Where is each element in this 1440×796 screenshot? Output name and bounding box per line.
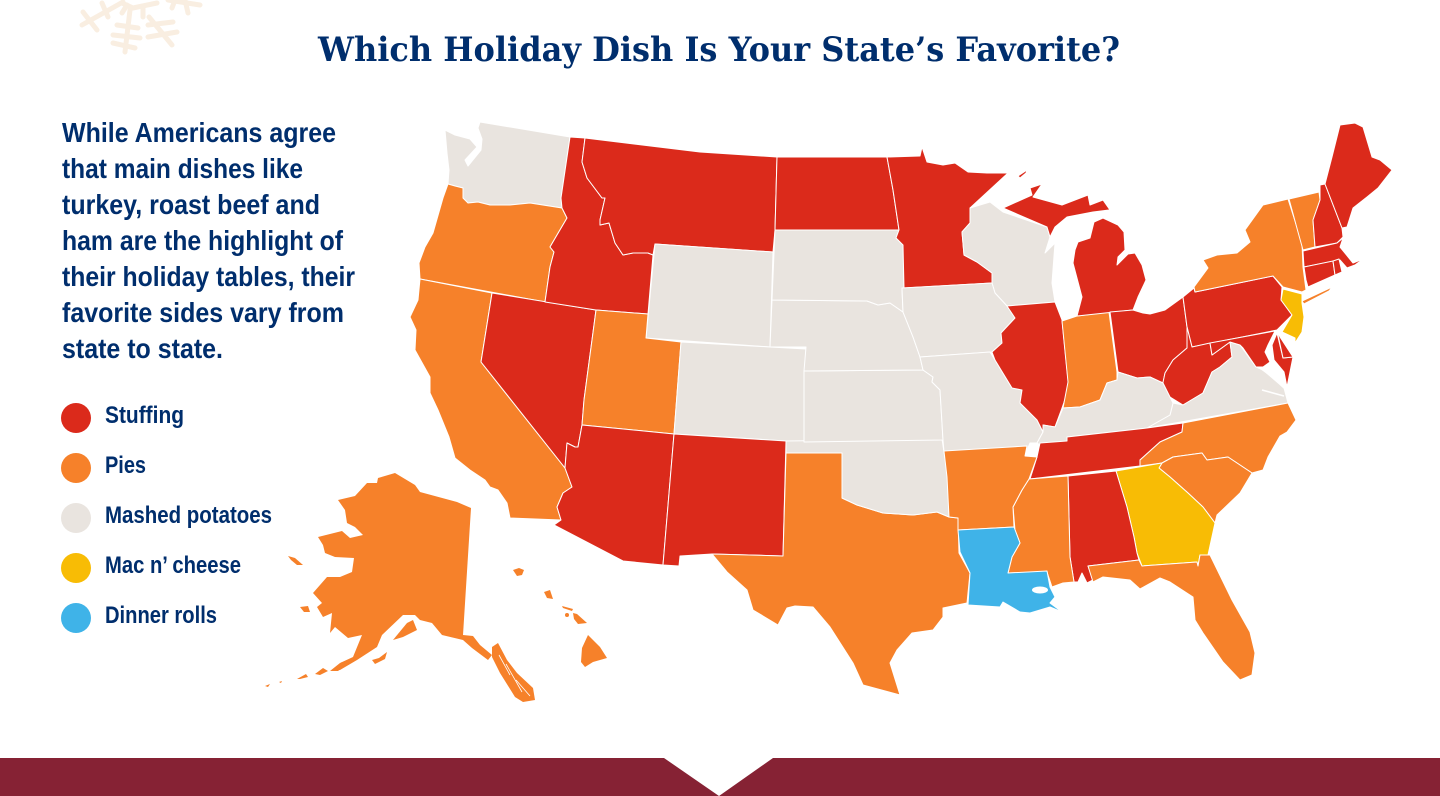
Maryland eastern shore — [1272, 333, 1293, 387]
Michigan lower peninsula — [1073, 218, 1146, 316]
legend: stuffing: Stuffing — [105, 402, 184, 429]
intro text: turkey, roast beef and — [62, 189, 320, 220]
Nunivak island — [300, 606, 310, 612]
Connecticut — [1304, 261, 1335, 287]
Wisconsin — [962, 202, 1055, 306]
legend: dinner rolls — [61, 602, 217, 633]
Vermont — [1289, 192, 1320, 250]
Big Island — [581, 635, 607, 667]
Rhode Island — [1333, 259, 1342, 275]
footer band — [0, 758, 1440, 796]
Southeast Alaska panhandle — [492, 643, 535, 702]
intro text: While Americans agree — [62, 117, 336, 148]
Long Island — [1302, 287, 1332, 304]
decorative snowflake — [82, 0, 200, 52]
Ohio — [1110, 297, 1187, 383]
Minnesota — [887, 147, 1008, 288]
Michigan upper peninsula — [1003, 184, 1117, 237]
Maryland western — [1210, 331, 1275, 367]
intro text: state to state. — [62, 333, 223, 364]
legend: mashed potatoes: Mashed potatoes — [105, 502, 272, 529]
legend: mashed potatoes — [61, 502, 272, 533]
US map — [265, 122, 1392, 702]
Lake Pontchartrain — [1032, 586, 1048, 594]
legend: stuffing — [61, 402, 184, 433]
title: Which Holiday Dish Is Your State’s Favorite? — [317, 30, 1120, 70]
Tennessee — [1030, 423, 1183, 479]
North Dakota — [775, 157, 899, 230]
New Jersey — [1281, 289, 1304, 343]
Kodiak island — [372, 652, 387, 664]
Molokai — [562, 606, 573, 611]
Delaware — [1277, 330, 1293, 358]
Georgia — [1116, 463, 1215, 566]
South Carolina — [1159, 453, 1252, 523]
Idaho — [545, 137, 653, 314]
intro text: their holiday tables, their — [62, 261, 355, 292]
Virginia — [1147, 342, 1288, 428]
Massachusetts — [1303, 238, 1363, 268]
St Lawrence island — [288, 556, 303, 565]
Oklahoma — [786, 439, 949, 517]
New York — [1194, 199, 1306, 292]
Oahu — [544, 590, 553, 599]
Lanai — [565, 613, 569, 617]
Alabama — [1068, 471, 1139, 583]
Arizona — [554, 425, 674, 565]
Kauai — [513, 568, 524, 576]
Alaska mainland — [313, 473, 492, 671]
Missouri — [920, 352, 1043, 455]
intro text — [62, 117, 355, 364]
intro text: ham are the highlight of — [62, 225, 344, 256]
Arkansas — [944, 446, 1037, 530]
legend: pies: Pies — [105, 452, 146, 479]
South Dakota — [772, 230, 904, 312]
Kenai peninsula — [393, 620, 417, 640]
West Virginia — [1162, 327, 1232, 405]
Wyoming — [646, 244, 773, 347]
Texas — [712, 453, 970, 695]
Hawaii — [513, 568, 607, 667]
Washington — [445, 122, 570, 208]
Alaska — [265, 473, 535, 702]
Isle Royale — [1018, 170, 1027, 178]
California — [410, 279, 572, 520]
North Carolina — [1140, 403, 1296, 473]
Kentucky — [1037, 372, 1173, 445]
New Hampshire — [1313, 184, 1343, 247]
Maine — [1325, 123, 1392, 228]
legend: pies — [61, 452, 146, 483]
Colorado — [674, 342, 806, 441]
Iowa — [902, 283, 1015, 357]
Nebraska — [770, 300, 923, 371]
legend: dinner rolls: Dinner rolls — [105, 602, 217, 629]
intro text: favorite sides vary from — [62, 297, 344, 328]
Kansas — [804, 370, 943, 442]
Chesapeake bay — [1260, 368, 1284, 396]
New Mexico — [663, 434, 786, 566]
legend: mac n' cheese — [61, 552, 241, 583]
legend: mac n' cheese: Mac n’ cheese — [105, 552, 241, 579]
Utah — [582, 310, 681, 434]
Mississippi — [1008, 476, 1074, 587]
Pennsylvania — [1183, 276, 1292, 347]
Nevada — [481, 293, 596, 468]
Panhandle inlets — [499, 655, 530, 696]
Illinois — [992, 302, 1069, 432]
Florida — [1088, 555, 1255, 680]
Montana — [582, 138, 777, 255]
legend — [61, 402, 272, 633]
Oregon — [419, 184, 567, 302]
Louisiana — [958, 527, 1062, 613]
Maui — [573, 613, 587, 624]
Aleutian islands — [265, 662, 346, 687]
Indiana — [1062, 312, 1117, 408]
intro text: that main dishes like — [62, 153, 303, 184]
